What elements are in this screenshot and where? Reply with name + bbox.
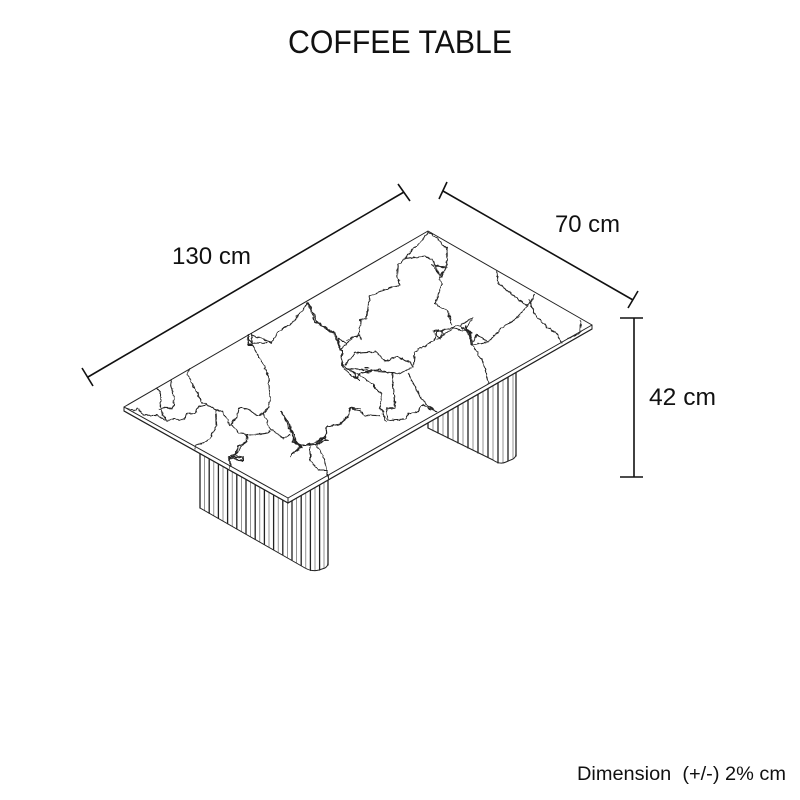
back leg xyxy=(428,360,516,463)
front leg xyxy=(200,440,328,571)
table top slab xyxy=(124,231,592,503)
marble veins front section xyxy=(228,440,247,468)
footnote: tolerance: Dimension (+/-) 2% cm xyxy=(577,763,786,785)
dimension: height xyxy=(620,318,643,477)
marble veins centre and right section xyxy=(281,232,581,457)
label: 70 cm: 70 cm xyxy=(555,211,620,238)
label: 42 cm: 42 cm xyxy=(649,384,716,411)
table drawing xyxy=(124,231,592,571)
label: 130 cm: 130 cm xyxy=(172,243,251,270)
title: COFFEE TABLE xyxy=(288,24,512,60)
dimension: width xyxy=(439,182,638,308)
marble veins xyxy=(127,232,581,480)
dimension: length xyxy=(82,184,410,386)
marble veins left section xyxy=(127,302,360,480)
